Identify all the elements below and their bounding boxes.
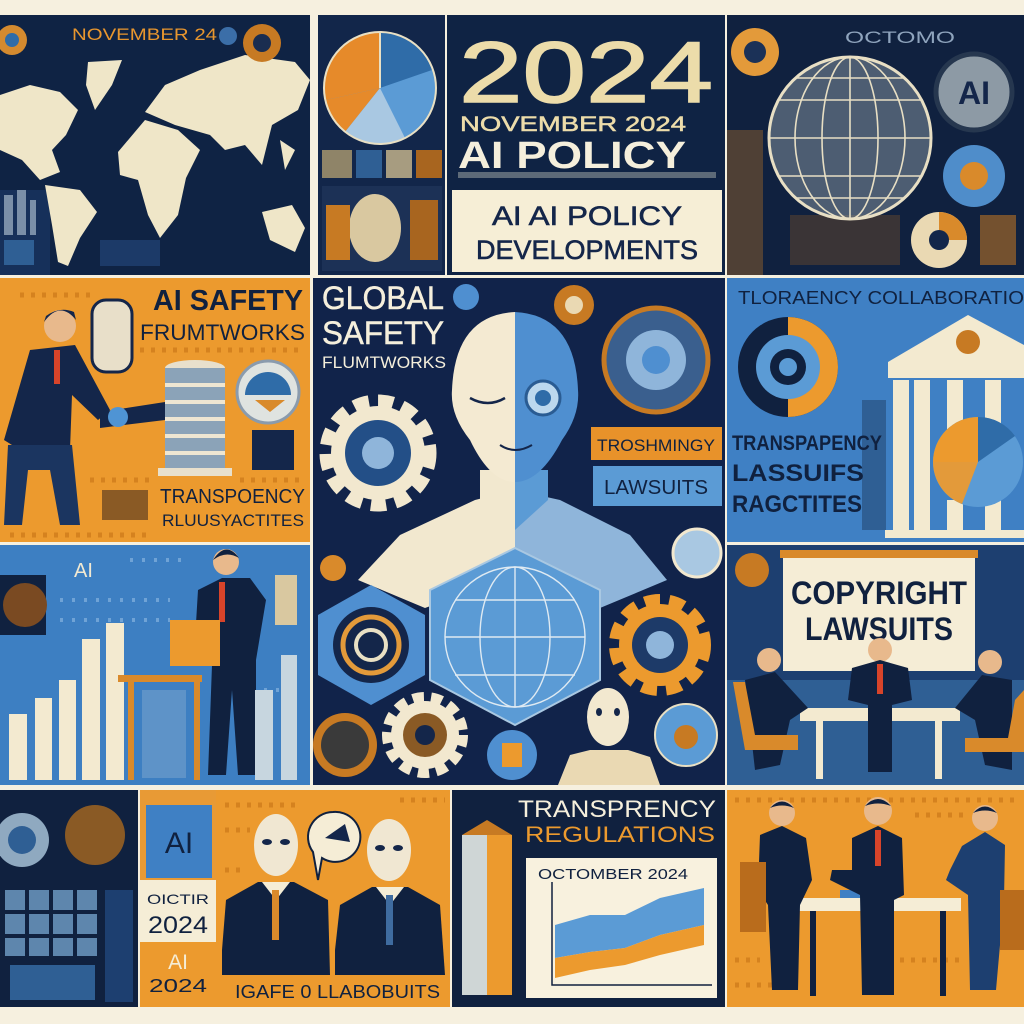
- table: [800, 708, 960, 779]
- AI date column: AI: [168, 951, 188, 974]
- hexagon spiral: [318, 585, 425, 705]
- pencil: [462, 820, 512, 995]
- bars: [9, 623, 124, 780]
- icon: dial: [0, 805, 125, 867]
- AI date column: AI: [165, 827, 193, 860]
- panel: title: [447, 15, 725, 275]
- panel: globe: OCTOMO: [845, 28, 955, 47]
- heading line 2: SAFETY: [322, 315, 444, 351]
- heading: TRANSPRENCY: [518, 796, 716, 823]
- AI date column: 2024: [148, 912, 208, 939]
- man left: [758, 800, 812, 990]
- AI badge: [936, 54, 1012, 130]
- left figure: [222, 814, 330, 975]
- panel: negotiation table: [727, 790, 1024, 1007]
- table: [785, 890, 961, 996]
- title box: DEVELOPMENTS: [476, 235, 698, 265]
- line chart: [526, 858, 717, 998]
- sign: LAWSUITS: [805, 611, 953, 647]
- calendar grid: [5, 890, 97, 956]
- heading: TLORAENCY COLLABORATIO: [738, 288, 1024, 308]
- target icon: [911, 212, 967, 268]
- courthouse: [885, 315, 1024, 538]
- orange chairs: [740, 862, 1024, 950]
- panel: bar chart presenter: [0, 545, 310, 785]
- caption line 2: RLUUSYACTITES: [162, 511, 304, 530]
- right figure: [335, 819, 445, 975]
- machine icon: [92, 300, 132, 372]
- panel: transparency collaboration: [727, 278, 1024, 542]
- caption: IGAFE 0 LLABOBUITS: [235, 982, 440, 1002]
- text block: RAGCTITES: [732, 491, 862, 518]
- figure head: [452, 312, 578, 482]
- panel: world map: [0, 15, 310, 275]
- cream gear: [388, 698, 462, 772]
- hexagon globe: [430, 548, 600, 725]
- panel: copyright lawsuits: [727, 545, 1024, 785]
- panel: transparency regulations: [452, 790, 725, 1007]
- AI date column: [140, 790, 216, 996]
- small medallions: [313, 284, 721, 780]
- heading: GLOBAL: [322, 280, 444, 316]
- man right: [946, 805, 1005, 990]
- panel heading: NOVEMBER 24: [72, 25, 217, 44]
- left gear: [327, 402, 429, 504]
- orange label: [591, 427, 722, 460]
- title box: [452, 190, 722, 272]
- subtitle date: NOVEMBER 2024: [460, 113, 686, 136]
- sign: COPYRIGHT: [791, 575, 967, 611]
- caption: TRANSPOENCY: [160, 486, 305, 508]
- globe wireframe: [769, 57, 931, 219]
- handshake: [100, 402, 165, 428]
- line chart: OCTOMBER 2024: [538, 866, 688, 883]
- sign: [780, 550, 978, 671]
- year: 2024: [459, 25, 713, 121]
- server stack: [158, 360, 232, 476]
- panel: AI safety frameworks: [0, 278, 310, 542]
- map continents: [0, 55, 310, 266]
- man centre: [830, 797, 904, 995]
- presenter: [170, 549, 266, 775]
- orange and blue pie: [933, 417, 1023, 507]
- text block: [732, 432, 882, 518]
- desk: [118, 675, 202, 780]
- AI badge: AI: [958, 75, 990, 111]
- panel: two AI figures: [140, 790, 450, 1007]
- orange label: TROSHMINGY: [597, 436, 715, 455]
- blue medallion: [943, 145, 1005, 207]
- heading: AI SAFETY: [153, 285, 303, 317]
- blue label: LAWSUITS: [604, 477, 708, 499]
- panel: globe: [727, 15, 1024, 275]
- small icon tiles: [322, 150, 442, 271]
- subheading: FLUMTWORKS: [322, 353, 446, 372]
- target chart: [738, 317, 838, 417]
- orange gear: [616, 601, 704, 689]
- gauge icon: [237, 361, 299, 423]
- title box: AI AI POLICY: [492, 201, 682, 231]
- person at desk: [4, 310, 110, 525]
- small device: [252, 430, 294, 470]
- people at table: [745, 638, 1012, 772]
- panel: bar chart presenter: AI: [74, 560, 93, 582]
- AI date column: OICTIR: [147, 891, 209, 907]
- blue label: [593, 466, 722, 506]
- subheading: FRUMTWORKS: [140, 320, 305, 345]
- panel: locks and calendar: [0, 790, 138, 1007]
- figure shoulders: [358, 470, 667, 608]
- small robot bust: [558, 688, 660, 785]
- heading line 2: REGULATIONS: [525, 822, 715, 847]
- title line: AI POLICY: [458, 135, 686, 177]
- panel: pie chart: [318, 15, 445, 275]
- bars icon: [4, 190, 36, 265]
- text block: LASSUIFS: [732, 460, 864, 487]
- orange chairs: [733, 682, 1024, 752]
- text block: TRANSPAPENCY: [732, 432, 882, 455]
- pie: [324, 32, 436, 144]
- AI date column: 2024: [149, 976, 207, 996]
- speech bubble: [308, 812, 360, 880]
- icon: gear: [731, 28, 779, 76]
- light columns: [255, 655, 297, 780]
- top-right circular lens: [604, 308, 708, 412]
- panel: central AI figure: [313, 278, 725, 785]
- icon: gear badge: [0, 24, 281, 62]
